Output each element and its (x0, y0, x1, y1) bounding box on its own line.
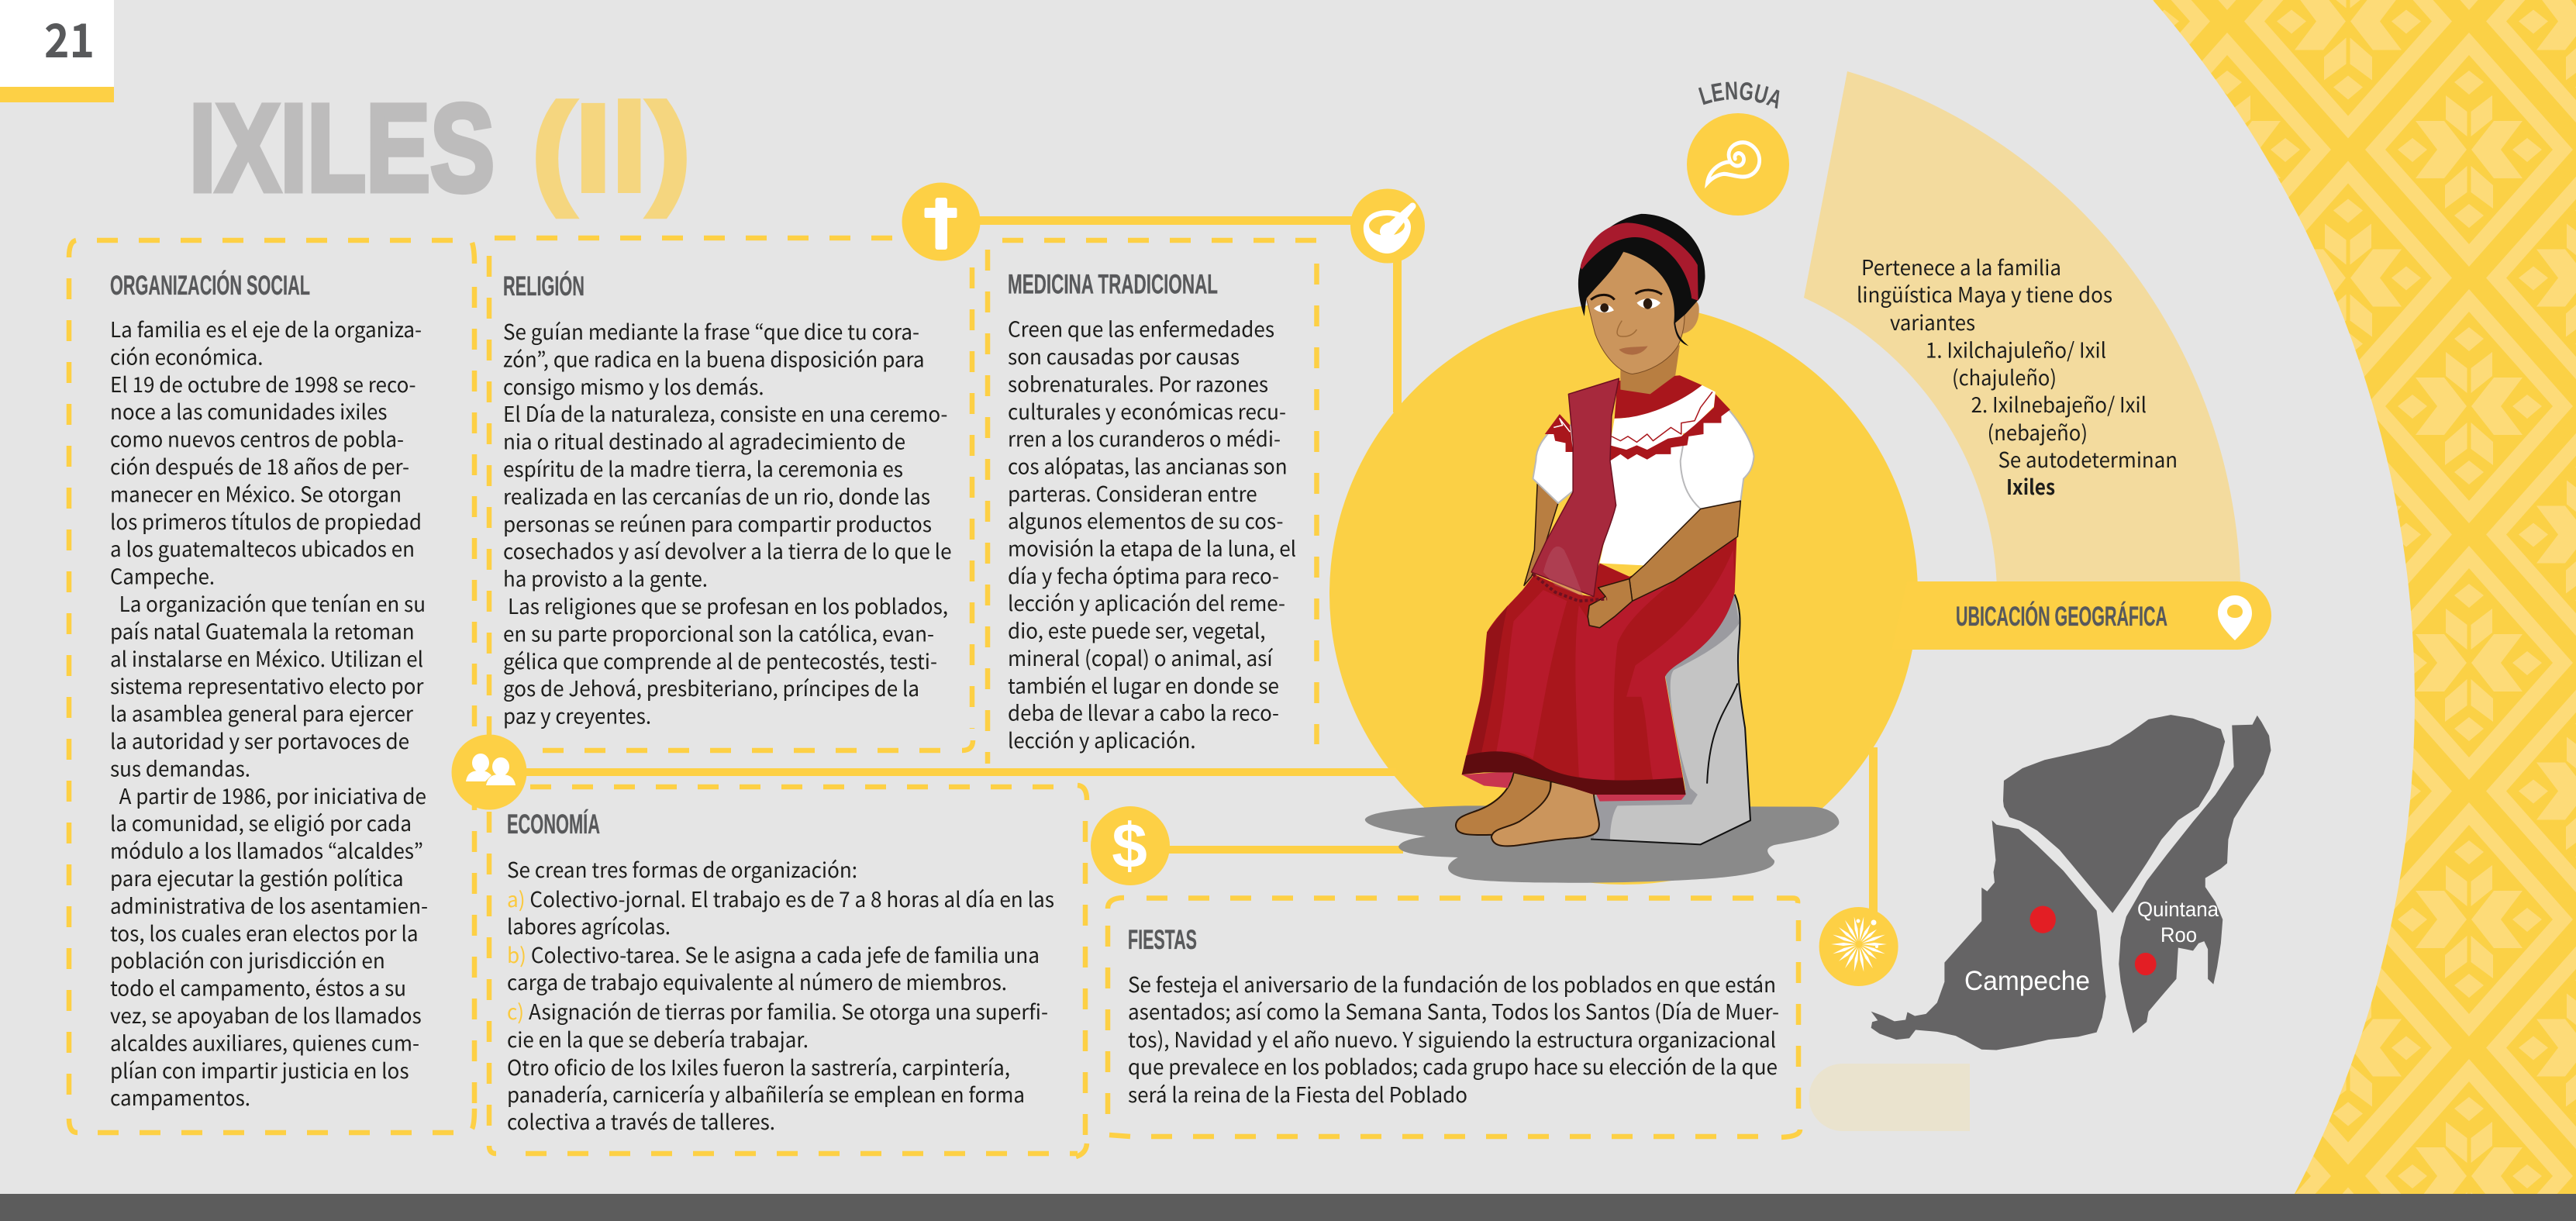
hand (1588, 579, 1633, 628)
icon: lengua (1687, 113, 1789, 216)
body text: Las religiones que se profesan en los poblados, (508, 590, 948, 620)
body text: nia o ritual destinado al agradecimiento de (503, 426, 905, 456)
body text: campamentos. (110, 1081, 250, 1112)
body text: a los guatemaltecos ubicados en (110, 533, 415, 563)
body text: como nuevos centros de pobla- (110, 423, 404, 454)
body text: A partir de 1986, por iniciativa de (119, 780, 426, 810)
icon: dollar (1091, 806, 1170, 885)
body text: Otro oficio de los Ixiles fueron la sastrería, carpintería, (507, 1051, 1010, 1081)
icon: fireworks (1819, 907, 1898, 986)
body text (110, 313, 428, 1112)
body text: sistema representativo electo por (110, 670, 424, 700)
hair (1578, 214, 1705, 346)
panel: economía (489, 785, 1087, 1157)
body text: será la reina de la Fiesta del Poblado (1128, 1078, 1467, 1109)
body text: Se guían mediante la frase “que dice tu cora- (503, 316, 919, 346)
mouth (1619, 346, 1648, 355)
heading: ECONOMÍA (507, 809, 600, 840)
headband (1581, 222, 1698, 301)
body text: La organización que tenían en su (119, 588, 426, 618)
icon: people (451, 735, 527, 809)
body text: culturales y económicas recu- (1008, 395, 1286, 426)
body text: gos de Jehová, presbiteriano, príncipes de la (503, 672, 919, 702)
lengua text: Pertenece a la familia (1861, 251, 2061, 281)
body text: módulo a los llamados “alcaldes” (110, 835, 423, 865)
body text: alcaldes auxiliares, quienes cum- (110, 1026, 419, 1057)
underskirt (1462, 771, 1686, 802)
map: Campeche (1871, 820, 2106, 1050)
near arm (1629, 501, 1740, 601)
heading: FIESTAS (1128, 925, 1197, 955)
body text: carga de trabajo equivalente al número de miembros. (507, 966, 1007, 996)
body text: algunos elementos de su cos- (1008, 505, 1284, 535)
stool (1591, 595, 1750, 845)
front foot (1491, 781, 1599, 846)
body text: vez, se apoyaban de los llamados (110, 999, 422, 1030)
map of the region (1871, 715, 2271, 1050)
body text: para ejecutar la gestión política (110, 862, 403, 892)
body text: los primeros títulos de propiedad (110, 505, 422, 536)
eyes and brows (1591, 290, 1662, 312)
map: Quintana Roo (2119, 716, 2271, 1033)
connector lines (489, 216, 1878, 914)
lengua text: variantes (1890, 306, 1975, 336)
lengua label: LENGUA (1698, 81, 1780, 109)
body text: parteras. Consideran entre (1008, 478, 1257, 508)
nose (1617, 321, 1636, 336)
body text: ha provisto a la gente. (503, 563, 708, 593)
map labels: Quintana (2137, 898, 2219, 921)
panel: religión (489, 238, 973, 750)
body text: manecer en México. Se otorgan (110, 478, 402, 508)
body text: Se festeja el aniversario de la fundación de los poblados en que están (1128, 968, 1776, 999)
face (1586, 252, 1685, 374)
icon: location pin (2218, 595, 2252, 640)
body text: población con jurisdicción en (110, 944, 385, 974)
bottom bar (0, 1194, 2576, 1221)
embroidered collar (1615, 375, 1702, 419)
lengua text: (chajuleño) (1952, 361, 2057, 391)
body text: Campeche. (110, 560, 215, 591)
heading: RELIGIÓN (503, 271, 585, 302)
icon: dollar: $ (1112, 811, 1147, 881)
panel: medicina tradicional (988, 240, 1318, 764)
ubicación geográfica bar: UBICACIÓN GEOGRÁFICA (1956, 601, 2167, 632)
embroidered zigzag (1545, 385, 1730, 460)
body text: zón”, que radica en la buena disposición para (503, 343, 924, 373)
beige tag (1809, 1064, 1970, 1131)
body text: país natal Guatemala la retoman (110, 615, 415, 645)
map marker: Campeche (2029, 906, 2056, 933)
body text: El Día de la naturaleza, consiste en una ceremo- (503, 398, 947, 428)
blouse sleeve left (1533, 426, 1574, 503)
floor shadow (1365, 805, 1839, 883)
shawl (1532, 378, 1619, 597)
body text: colectiva a través de talleres. (507, 1105, 775, 1136)
heading: MEDICINA TRADICIONAL (1008, 270, 1218, 299)
body text: también el lugar en donde se (1008, 669, 1279, 699)
body text: que prevalece en los poblados; cada grupo hace su elección de la que (1128, 1050, 1778, 1081)
body text: ción después de 18 años de per- (110, 450, 409, 481)
body text: al instalarse en México. Utilizan el (110, 643, 423, 673)
body text: en su parte proporcional son la católica, evan- (503, 617, 934, 647)
panel: organización social (69, 240, 474, 1133)
body text (1128, 968, 1779, 1109)
big yellow circle (1329, 303, 1918, 885)
far arm (1524, 483, 1558, 585)
body text: lección y aplicación. (1008, 724, 1196, 754)
map labels: Campeche (1964, 966, 2090, 996)
body text: consigo mismo y los demás. (503, 371, 764, 401)
page number tab (0, 0, 114, 102)
body text: c) Asignación de tierras por familia. Se otorga una superfi- (507, 995, 1048, 1026)
body text: cie en la que se debería trabajar. (507, 1023, 809, 1054)
body text: sobrenaturales. Por razones (1008, 367, 1268, 398)
body text: movisión la etapa de la luna, el (1008, 532, 1296, 563)
lengua text: 1. Ixilchajuleño/ Ixil (1926, 333, 2106, 364)
title: (Il) (532, 78, 691, 217)
ear (1681, 301, 1699, 334)
body text: son causadas por causas (1008, 340, 1240, 371)
body text: día y fecha óptima para reco- (1008, 560, 1279, 590)
body text: a) Colectivo-jornal. El trabajo es de 7 a 8 horas al día en las (507, 883, 1054, 913)
body text: cos alópatas, las ancianas son (1008, 450, 1288, 481)
body text: la asamblea general para ejercer (110, 698, 413, 728)
icon: mortar and pestle (1350, 189, 1425, 264)
page number tab: 21 (44, 4, 95, 71)
lengua fan panel (1804, 71, 2240, 581)
body text: panadería, carnicería y albañilería se emplean en forma (507, 1078, 1025, 1109)
body text: todo el campamento, éstos a su (110, 972, 406, 1002)
decorative woven pattern band (2153, 0, 2576, 1194)
body text: tos, los cuales eran electos por la (110, 917, 419, 947)
lengua text (1857, 251, 2178, 501)
body text: mineral (copal) o animal, así (1008, 642, 1274, 672)
title: IXILES (189, 78, 495, 217)
body text: la comunidad, se eligió por cada (110, 807, 412, 837)
body text: ción económica. (110, 340, 264, 371)
lengua text: Se autodeterminan (1998, 443, 2178, 474)
body text: asentados; así como la Semana Santa, Todos los Santos (Día de Muer- (1128, 995, 1779, 1026)
blouse body (1600, 421, 1701, 565)
body text: realizada en las cercanías de un rio, donde las (503, 480, 930, 510)
body text (1008, 313, 1296, 754)
body text: rren a los curanderos o médi- (1008, 423, 1281, 453)
body text: noce a las comunidades ixiles (110, 395, 388, 426)
panel: fiestas (1108, 898, 1800, 1137)
back foot (1456, 772, 1550, 835)
body text: Creen que las enfermedades (1008, 313, 1274, 343)
body text: El 19 de octubre de 1998 se reco- (110, 368, 416, 398)
lengua text: (nebajeño) (1988, 416, 2088, 447)
map marker: Quintana Roo (2135, 953, 2157, 975)
body text: la autoridad y ser portavoces de (110, 725, 409, 755)
body text: espíritu de la madre tierra, la ceremonia es (503, 453, 903, 483)
body text: cosechados y así devolver a la tierra de lo que le (503, 535, 952, 565)
body text: Se crean tres formas de organización: (507, 854, 857, 884)
body text: plían con impartir justicia en los (110, 1054, 409, 1085)
body text: sus demandas. (110, 752, 250, 782)
neck (1620, 345, 1680, 394)
body text: personas se reúnen para compartir productos (503, 508, 932, 538)
map labels (1964, 898, 2219, 996)
heading: ORGANIZACIÓN SOCIAL (110, 270, 310, 301)
shawl fringe (1533, 574, 1607, 601)
body text: administrativa de los asentamien- (110, 889, 428, 919)
lengua text: lingüística Maya y tiene dos (1857, 278, 2112, 309)
body text: deba de llevar a cabo la reco- (1008, 697, 1279, 727)
body text: La familia es el eje de la organiza- (110, 313, 422, 343)
ubicación geográfica bar (1891, 581, 2271, 650)
lengua text: Ixiles (2006, 471, 2055, 501)
body text: lección y aplicación del reme- (1008, 587, 1285, 617)
skirt (1462, 536, 1736, 795)
body text: paz y creyentes. (503, 700, 651, 730)
lengua label (1698, 81, 1780, 109)
icon: cross (902, 183, 980, 260)
body text: gélica que comprende al de pentecostés, testi- (503, 645, 937, 675)
illustration: seated Ixil woman (1456, 214, 1754, 846)
body text: labores agrícolas. (507, 910, 671, 940)
map: Yucatán (2003, 715, 2225, 913)
body text: dio, este puede ser, vegetal, (1008, 615, 1265, 645)
body text (507, 854, 1054, 1136)
body text: tos), Navidad y el año nuevo. Y siguiendo la estructura organizacional (1128, 1023, 1776, 1054)
body text (503, 316, 952, 730)
map labels: Roo (2160, 923, 2197, 947)
skirt stripes (1496, 550, 1735, 784)
lengua text: 2. Ixilnebajeño/ Ixil (1971, 388, 2147, 419)
blouse sleeve right (1681, 409, 1754, 509)
shawl fold (1543, 547, 1584, 597)
body text: b) Colectivo-tarea. Se le asigna a cada jefe de familia una (507, 939, 1040, 969)
skirt hem (1462, 751, 1686, 795)
